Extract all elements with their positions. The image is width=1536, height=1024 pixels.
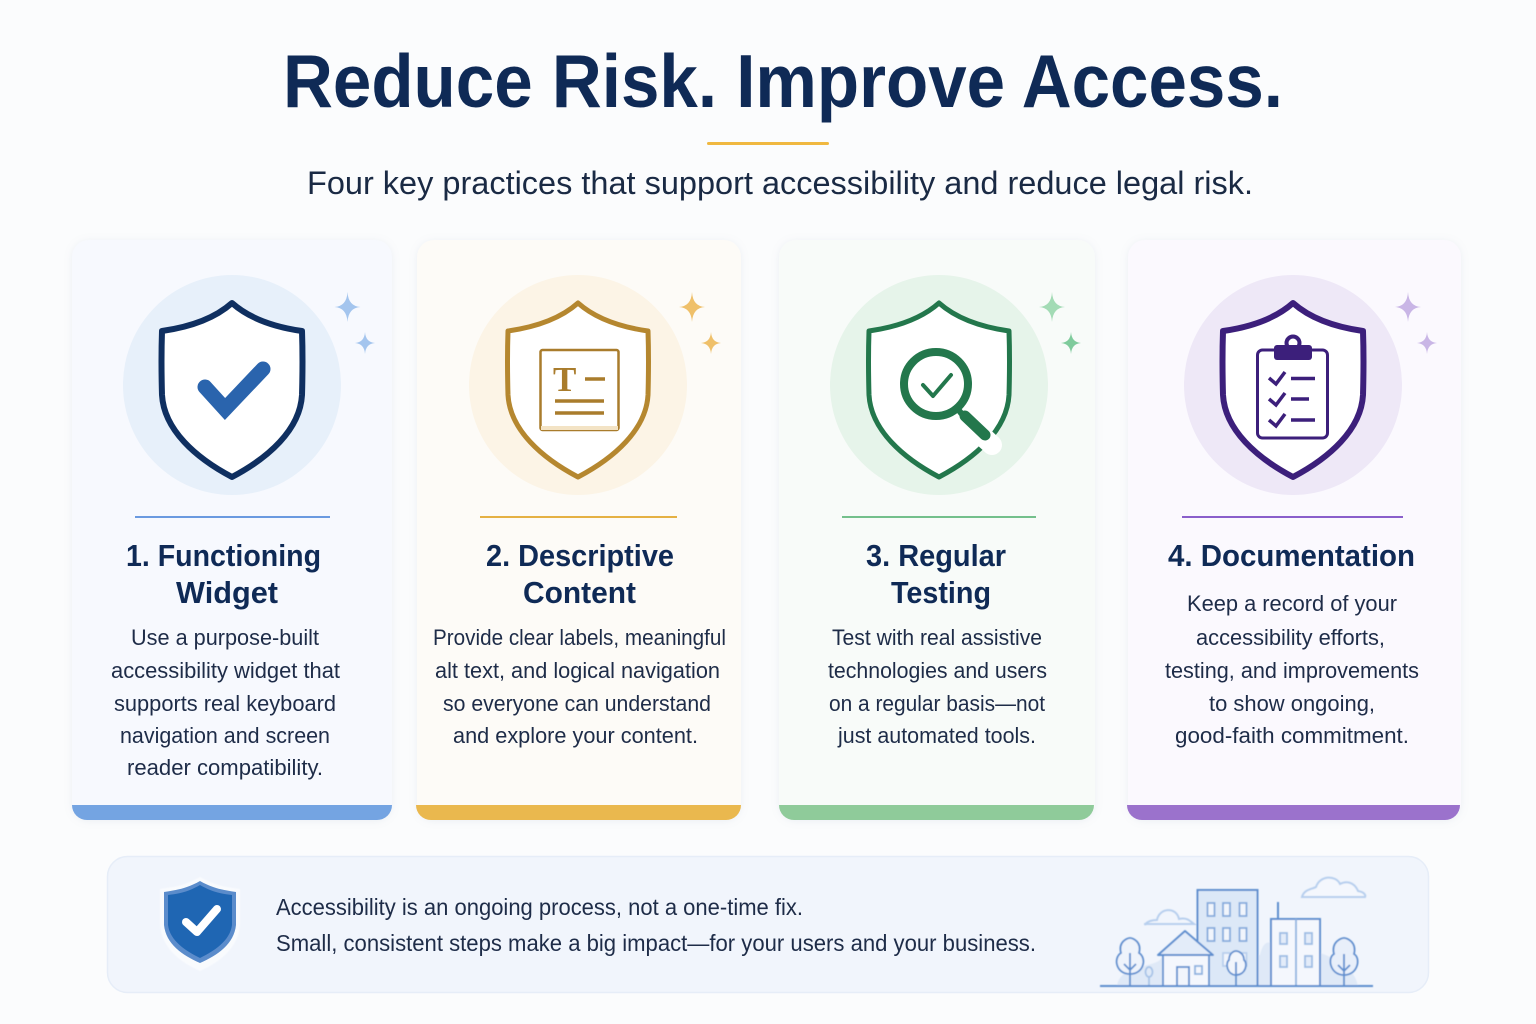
text block: on a regular basis—not xyxy=(829,691,1045,716)
text block: testing, and improvements xyxy=(1165,658,1419,683)
text block xyxy=(828,625,1047,748)
text block: technologies and users xyxy=(828,658,1047,683)
icon: shield with clipboard xyxy=(1184,275,1437,495)
heading: Widget xyxy=(176,575,278,610)
icon: shield with magnifier xyxy=(830,275,1081,495)
heading: 1. Functioning xyxy=(126,538,321,573)
text block: supports real keyboard xyxy=(114,691,336,716)
text block: Provide clear labels, meaningful xyxy=(433,625,726,650)
text block: Keep a record of your xyxy=(1187,591,1397,616)
icon: shield with check xyxy=(123,275,375,495)
text block: to show ongoing, xyxy=(1209,691,1375,716)
heading: Testing xyxy=(891,575,991,610)
text block: reader compatibility. xyxy=(127,755,323,780)
callout text xyxy=(276,894,1036,956)
heading: 4. Documentation xyxy=(1168,538,1415,573)
heading xyxy=(866,538,1006,610)
text block: and explore your content. xyxy=(453,723,698,748)
icon: shield with document: T xyxy=(553,360,576,399)
callout text: Accessibility is an ongoing process, not a one-time fix. xyxy=(276,894,803,920)
text block: navigation and screen xyxy=(120,723,330,748)
title underline xyxy=(707,142,829,145)
text block: Use a purpose-built xyxy=(131,625,319,650)
heading: 3. Regular xyxy=(866,538,1006,573)
panel: bottom callout xyxy=(108,856,1428,992)
text block xyxy=(1165,591,1419,748)
heading: Content xyxy=(523,575,636,610)
panel: functioning widget xyxy=(72,240,392,820)
panel: descriptive content xyxy=(416,240,741,820)
text block: just automated tools. xyxy=(837,723,1036,748)
subtitle: Four key practices that support accessibility and reduce legal risk. xyxy=(307,165,1253,201)
callout text: Small, consistent steps make a big impact—for your users and your business. xyxy=(276,930,1036,956)
icon: shield with document xyxy=(469,275,721,495)
heading xyxy=(126,538,321,610)
text block: Test with real assistive xyxy=(832,625,1042,650)
heading xyxy=(486,538,674,610)
text block: accessibility efforts, xyxy=(1196,625,1385,650)
text block: accessibility widget that xyxy=(111,658,340,683)
title: Reduce Risk. Improve Access. xyxy=(283,39,1283,123)
heading: 2. Descriptive xyxy=(486,538,674,573)
text block xyxy=(433,625,726,748)
text block xyxy=(111,625,340,780)
panel: documentation xyxy=(1127,240,1461,820)
text block: alt text, and logical navigation xyxy=(435,658,720,683)
text block: so everyone can understand xyxy=(443,691,711,716)
panel: regular testing xyxy=(779,240,1095,820)
text block: good-faith commitment. xyxy=(1175,723,1409,748)
icon: small blue shield xyxy=(160,877,240,971)
illustration: city skyline xyxy=(1100,878,1373,986)
